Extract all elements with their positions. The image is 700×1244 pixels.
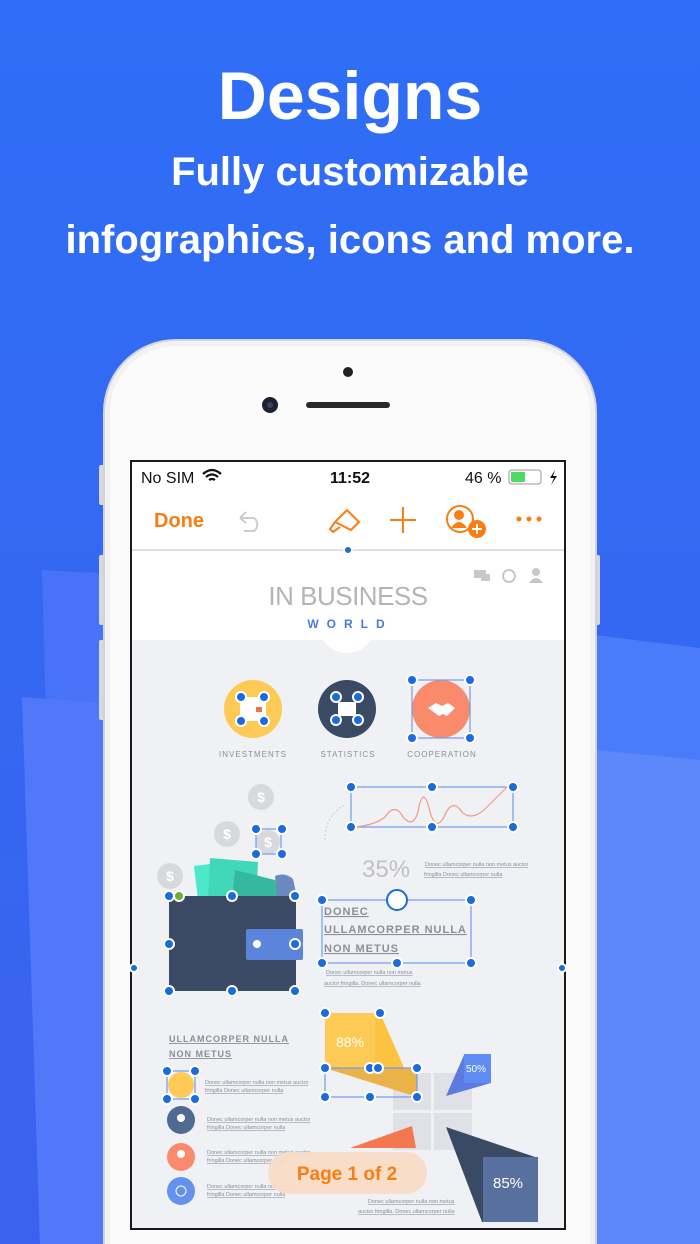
- icons row: [219, 675, 477, 759]
- line chart: 35%: [362, 856, 410, 883]
- 3D chart: auctor fringilla. Donec ullamcorper nulla: [358, 1209, 456, 1215]
- status bar: No SIM: [141, 470, 194, 487]
- icons row: COOPERATION: [407, 750, 477, 759]
- wallet: [130, 858, 566, 996]
- 3D chart: 88%: [336, 1034, 364, 1050]
- list: [162, 1034, 311, 1205]
- header: WORLD: [307, 617, 393, 631]
- page pill: Page 1 of 2: [297, 1164, 397, 1185]
- phone frame: [99, 340, 600, 1244]
- list: fringilla Donec ullamcorper nulla: [207, 1125, 286, 1131]
- text block: Donec ullamcorper nulla non metus: [326, 970, 413, 976]
- subtitle: Fully customizable: [171, 150, 529, 194]
- header: [132, 546, 564, 653]
- text block: auctor fringilla. Donec ullamcorper nulla: [324, 981, 422, 987]
- list: fringilla Donec ullamcorper nulla: [205, 1088, 284, 1094]
- coins: [157, 784, 287, 889]
- list: NON METUS: [169, 1049, 232, 1059]
- text block: NON METUS: [324, 943, 399, 955]
- page pill: [268, 1152, 427, 1194]
- list: Donec ullamcorper nulla non metus auctor: [207, 1150, 311, 1156]
- list: fringilla Donec ullamcorper nulla: [207, 1158, 286, 1164]
- text block: [317, 890, 476, 987]
- status bar: 11:52: [330, 470, 370, 487]
- subtitle: infographics, icons and more.: [66, 218, 634, 262]
- text block: DONEC: [324, 906, 369, 918]
- coins: $: [223, 826, 231, 842]
- list: ULLAMCORPER NULLA: [169, 1034, 289, 1044]
- subtitle: [66, 150, 634, 262]
- line chart: [325, 782, 529, 883]
- toolbar: Done: [154, 510, 204, 532]
- status bar: [141, 470, 557, 487]
- coins: $: [257, 789, 265, 805]
- header: IN BUSINESS: [268, 581, 428, 611]
- 3D chart: 50%: [466, 1064, 486, 1075]
- status bar: 46 %: [465, 470, 501, 487]
- toolbar: [154, 506, 542, 538]
- title: Designs: [218, 58, 482, 134]
- screen: [130, 461, 566, 1229]
- 3D chart: 85%: [493, 1175, 523, 1192]
- line chart: Donec ullamcorper nulla non metus auctor: [425, 862, 529, 868]
- list: fringilla Donec ullamcorper nulla: [207, 1192, 286, 1198]
- coins: $: [166, 868, 174, 884]
- icons row: STATISTICS: [320, 750, 376, 759]
- coins: $: [264, 834, 272, 850]
- icons row: INVESTMENTS: [219, 750, 287, 759]
- 3D chart: [320, 1008, 538, 1222]
- list: Donec ullamcorper nulla non metus: [207, 1184, 294, 1190]
- text block: ULLAMCORPER NULLA: [324, 924, 467, 936]
- list: Donec ullamcorper nulla non metus auctor: [205, 1080, 309, 1086]
- list: Donec ullamcorper nulla non metus auctor: [207, 1117, 311, 1123]
- 3D chart: Donec ullamcorper nulla non metus: [368, 1199, 455, 1205]
- line chart: fringilla Donec ullamcorper nulla: [424, 872, 503, 878]
